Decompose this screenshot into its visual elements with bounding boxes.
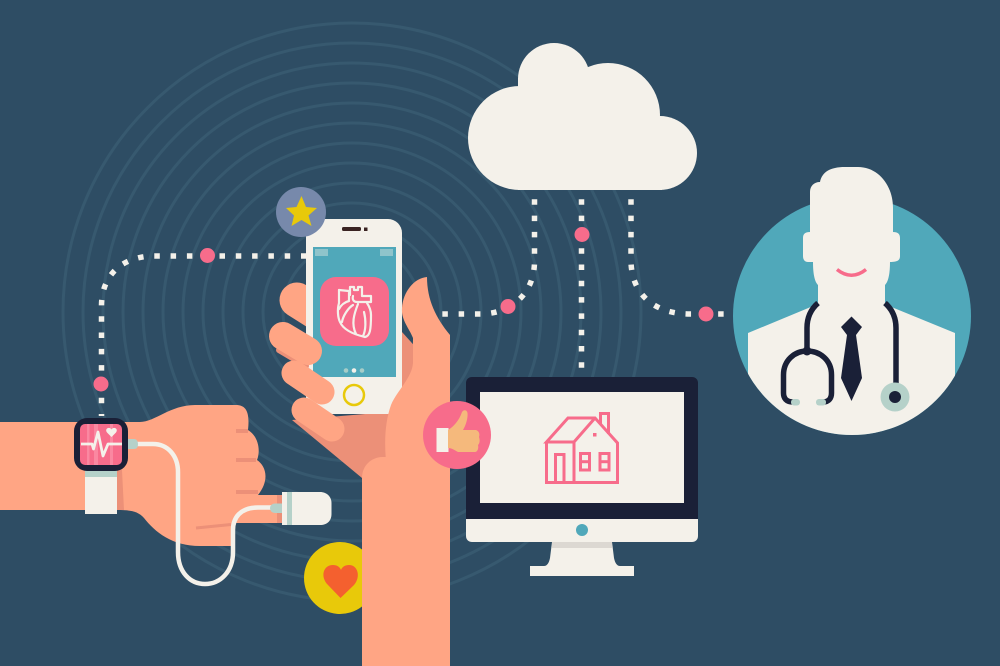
stethoscope ear tips bbox=[791, 399, 826, 406]
chin bbox=[466, 518, 698, 542]
white coat bbox=[748, 304, 955, 440]
screen bbox=[480, 392, 684, 503]
ECG trace bbox=[81, 432, 122, 456]
sensor cable bbox=[136, 444, 272, 584]
speaker bbox=[342, 227, 361, 231]
badge: thumbs up bbox=[423, 401, 491, 469]
wrist hand with watch bbox=[0, 405, 332, 584]
stethoscope joint bbox=[802, 346, 812, 356]
badge: heart bbox=[304, 542, 362, 614]
cloud bbox=[468, 43, 697, 190]
phone body bbox=[306, 219, 402, 414]
status bar marks bbox=[315, 249, 328, 256]
phone screen bbox=[313, 247, 396, 377]
finger shadow bbox=[279, 350, 306, 366]
watch screen bbox=[80, 424, 122, 465]
pager dots bbox=[344, 368, 348, 373]
icon: anatomical heart bbox=[338, 287, 371, 337]
head and neck bbox=[803, 167, 900, 320]
home button bbox=[344, 385, 364, 405]
cable connector bbox=[128, 439, 138, 449]
watch strap bbox=[85, 470, 117, 514]
finger behind phone bbox=[297, 300, 316, 312]
thumb and palm bbox=[385, 277, 450, 500]
desktop monitor bbox=[466, 377, 698, 576]
dotted connection lines bbox=[102, 199, 725, 416]
arm and fist bbox=[0, 405, 285, 546]
bezel bbox=[466, 377, 698, 519]
app tile bbox=[320, 277, 389, 346]
stand bbox=[544, 542, 620, 566]
phone bbox=[306, 219, 402, 414]
icon: house bbox=[546, 414, 618, 482]
forearm bbox=[362, 457, 450, 666]
power button bbox=[576, 524, 588, 536]
small heart bbox=[106, 428, 117, 437]
finger sensor bbox=[282, 492, 332, 525]
concentric signal rings bbox=[63, 23, 641, 601]
knuckle lines bbox=[196, 431, 280, 528]
strap shadow bbox=[117, 470, 124, 510]
stand base bbox=[530, 566, 634, 576]
stethoscope bbox=[784, 303, 896, 402]
doctor avatar bbox=[733, 167, 971, 440]
tie bbox=[841, 316, 862, 401]
smile bbox=[837, 270, 866, 275]
watch case bbox=[74, 418, 128, 471]
chest piece bbox=[880, 382, 910, 412]
teal circle bbox=[733, 197, 971, 435]
hand holding phone bbox=[279, 219, 450, 666]
watch screen stripes bbox=[87, 424, 113, 465]
badge: star bbox=[276, 187, 326, 237]
fingers over phone bbox=[283, 336, 332, 429]
palm shadow bbox=[292, 332, 420, 478]
connection nodes bbox=[94, 227, 714, 392]
